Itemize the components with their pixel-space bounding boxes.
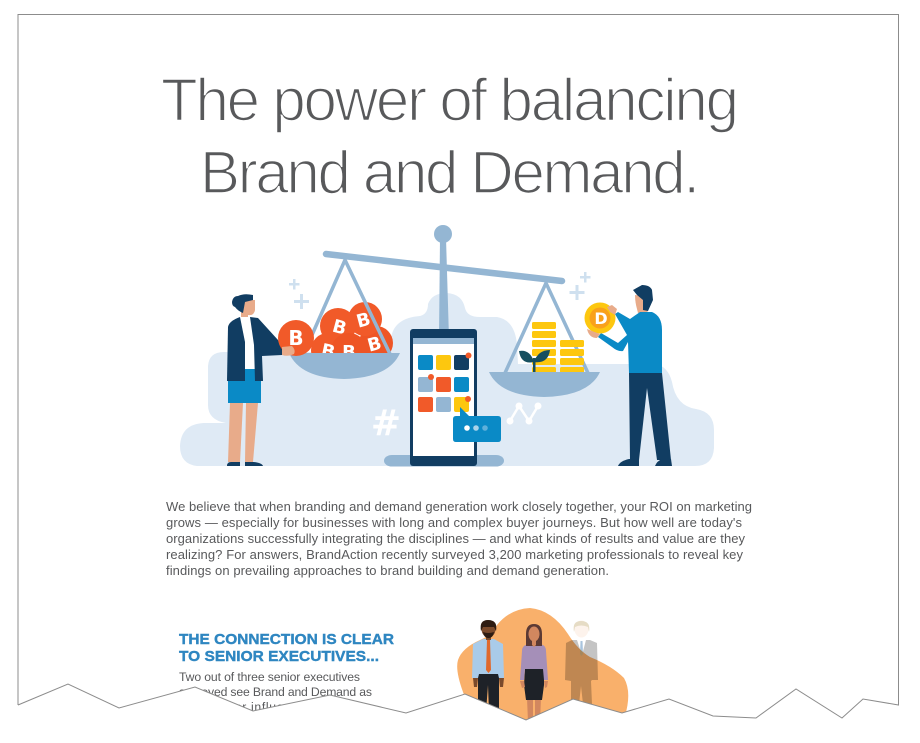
coins B pile: B bbox=[354, 309, 373, 333]
section heading: TO SENIOR EXECUTIVES... bbox=[179, 648, 379, 665]
coins B pile: B bbox=[342, 342, 356, 363]
right pan bbox=[489, 372, 600, 397]
intro paragraph: grows — especially for businesses with long and complex buyer journeys. But how well are today's bbox=[166, 515, 742, 530]
plant bbox=[519, 350, 550, 373]
man holding D coin: D bbox=[594, 309, 608, 328]
phone stand bbox=[384, 455, 504, 466]
chat bubble bbox=[453, 407, 501, 442]
intro paragraph: findings on prevailing approaches to brand building and demand generation. bbox=[166, 563, 609, 578]
torn page mask bbox=[0, 684, 920, 743]
scale pole bbox=[439, 238, 449, 338]
intro paragraph: organizations successfully integrating the disciplines — and what kinds of results and value are they bbox=[166, 531, 746, 546]
right hanger bbox=[505, 283, 588, 373]
plus signs left bbox=[289, 279, 309, 309]
left hanger bbox=[312, 260, 390, 354]
gold stacks bbox=[532, 322, 584, 373]
line chart icon bbox=[507, 403, 541, 424]
executives illustration bbox=[457, 608, 628, 725]
plus signs right bbox=[570, 272, 590, 300]
section heading bbox=[179, 631, 394, 665]
section heading: THE CONNECTION IS CLEAR bbox=[179, 631, 394, 648]
man holding D coin bbox=[584, 285, 672, 466]
intro paragraph bbox=[166, 499, 752, 578]
woman holding B coin: B bbox=[288, 326, 304, 350]
left pan bbox=[289, 353, 400, 379]
title: The power of balancing bbox=[161, 66, 739, 134]
orange blob bbox=[457, 608, 628, 725]
illustration: balancing scale bbox=[180, 225, 714, 466]
executive man bbox=[472, 620, 504, 712]
background blob bbox=[180, 293, 714, 466]
title bbox=[161, 66, 739, 206]
phone bbox=[410, 329, 477, 466]
section body text bbox=[179, 670, 372, 714]
coins B pile: B bbox=[330, 316, 349, 340]
title: Brand and Demand. bbox=[200, 139, 700, 206]
executive woman bbox=[520, 624, 548, 722]
coins B pile: B bbox=[365, 333, 384, 357]
section body text: strategic or influential bbox=[179, 700, 309, 714]
section body text: surveyed see Brand and Demand as bbox=[179, 685, 372, 699]
section body text: Two out of three senior executives bbox=[179, 670, 360, 684]
hash symbol: # bbox=[371, 403, 401, 444]
intro paragraph: realizing? For answers, BrandAction recently surveyed 3,200 marketing professionals to reveal key bbox=[166, 547, 744, 562]
faded executive man bbox=[565, 620, 598, 704]
coins B pile: B bbox=[319, 340, 337, 363]
intro paragraph: We believe that when branding and demand generation work closely together, your ROI on marketing bbox=[166, 499, 752, 514]
coins B pile bbox=[311, 302, 393, 353]
scale knob bbox=[434, 225, 452, 243]
beam bbox=[326, 254, 562, 281]
woman holding B coin bbox=[227, 294, 314, 466]
